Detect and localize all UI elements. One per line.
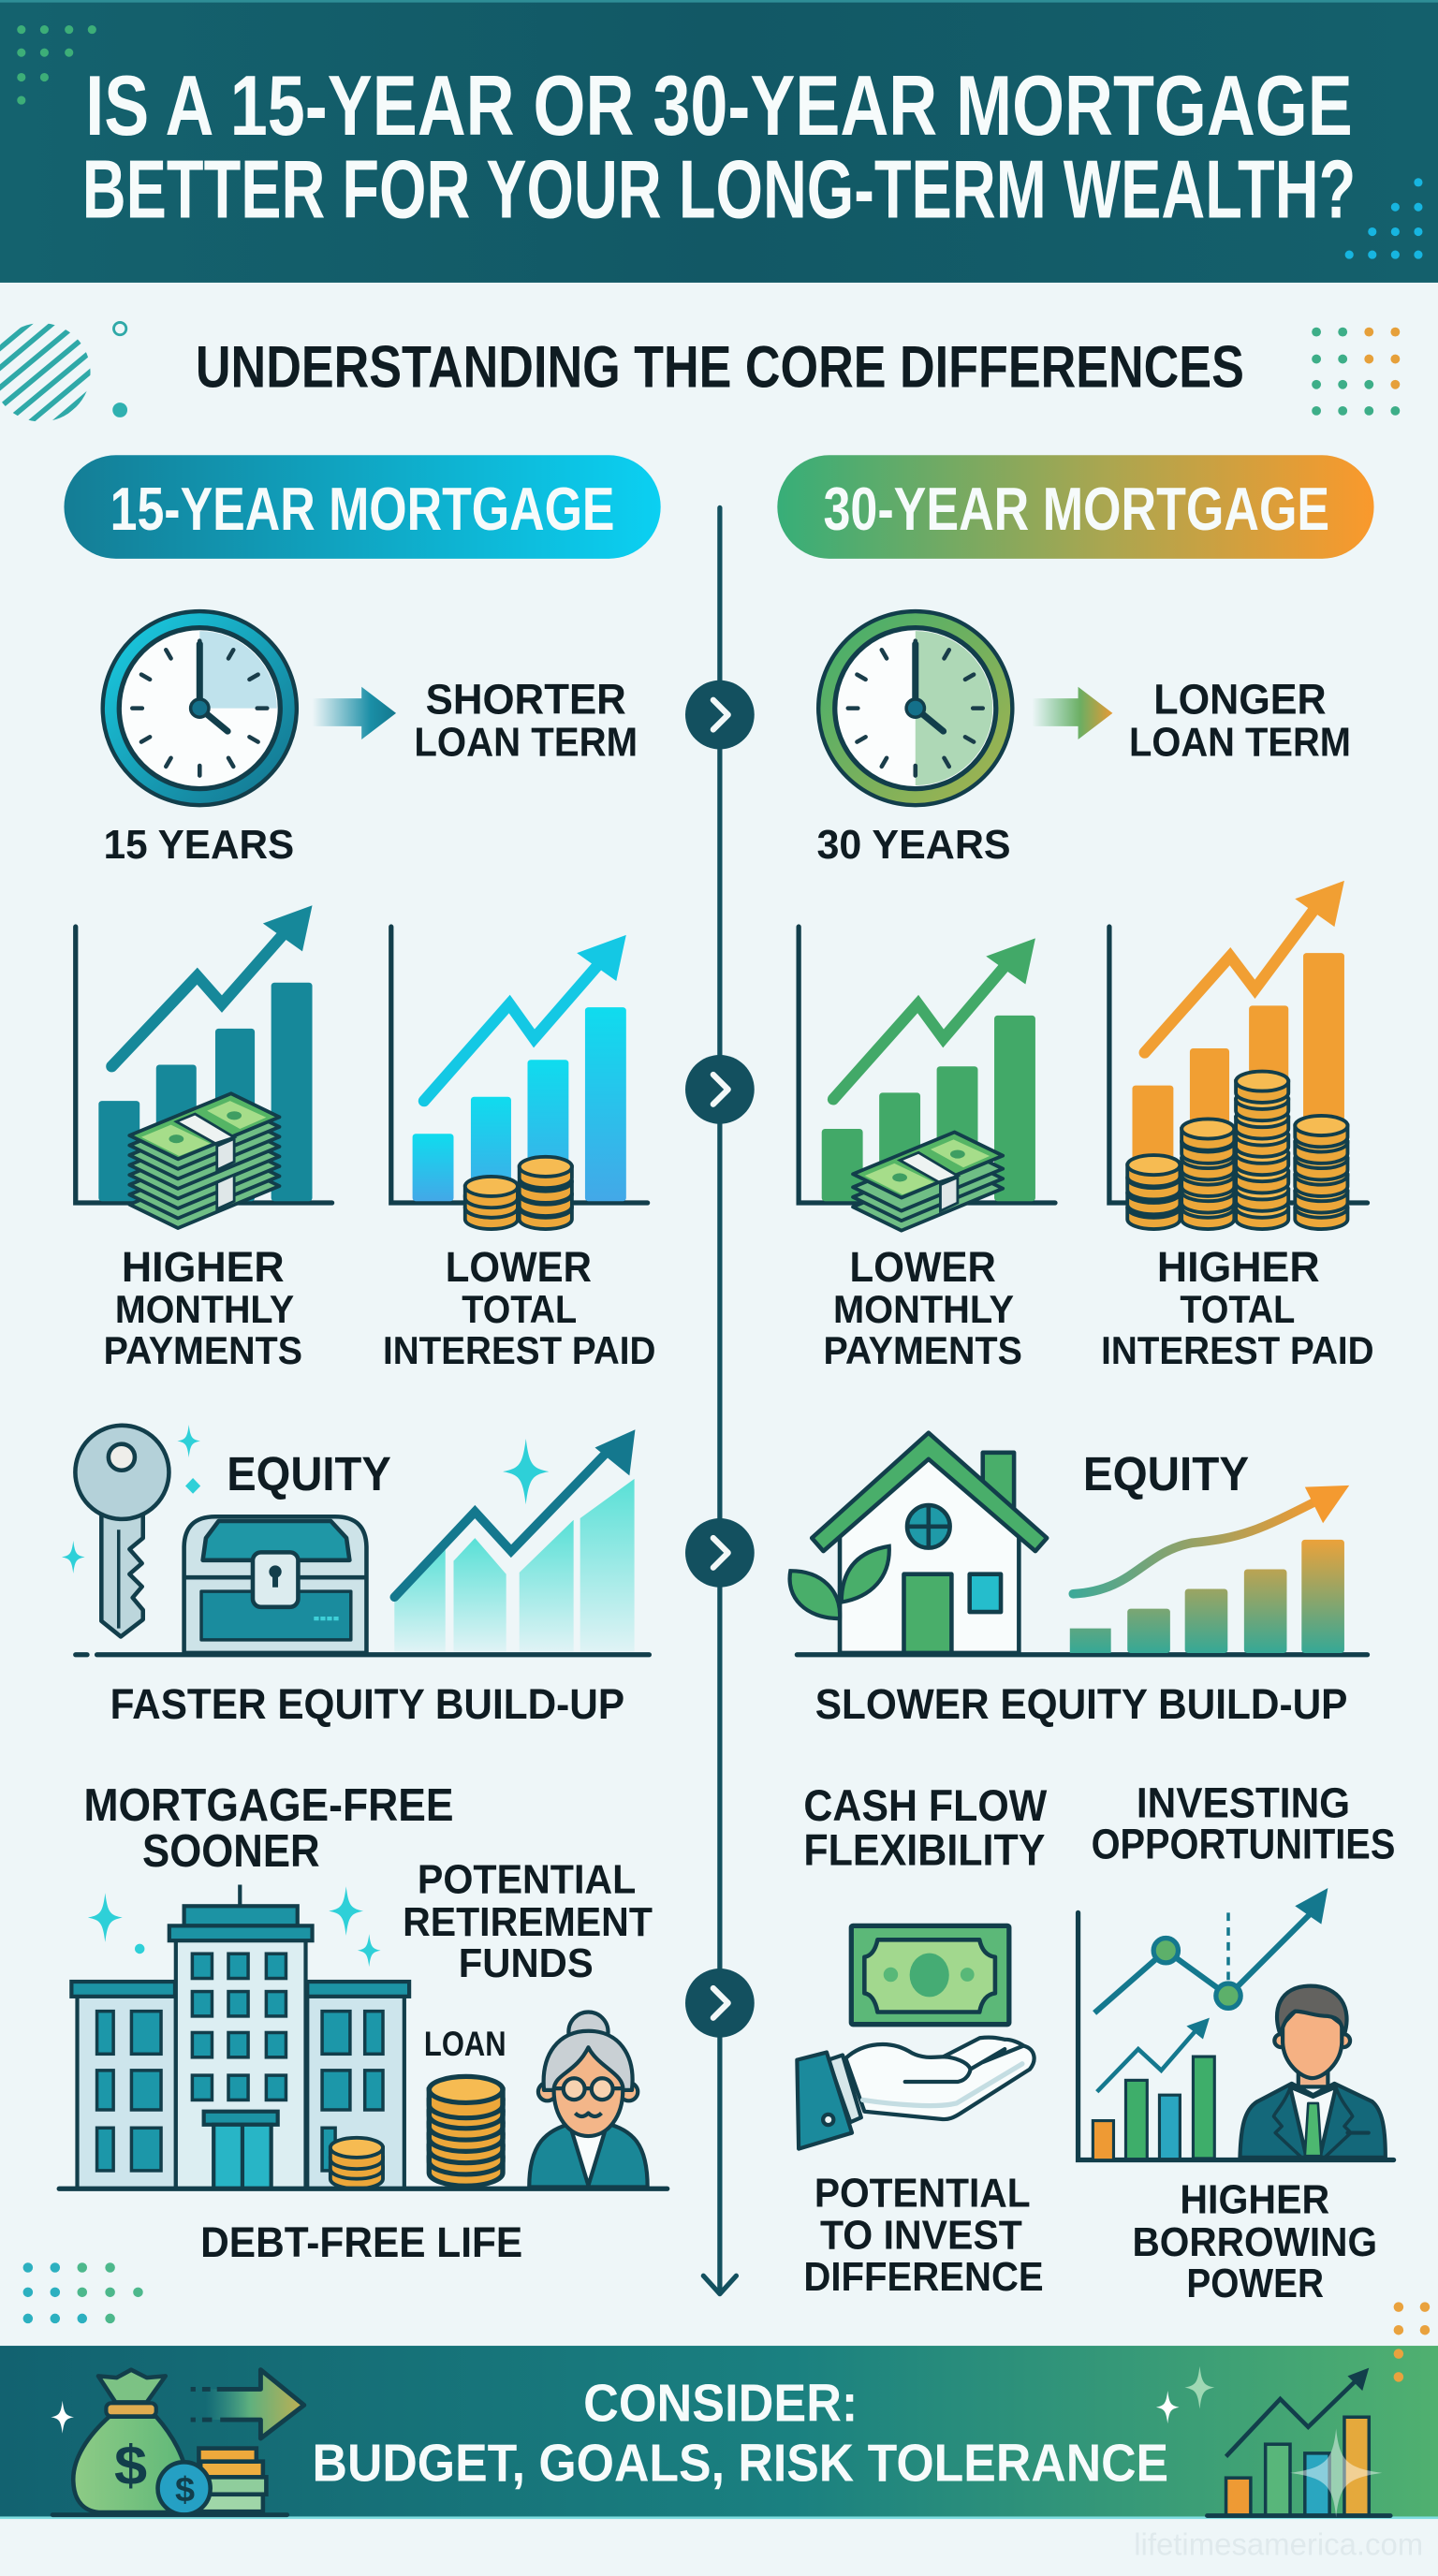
chart: higher monthly payments	[76, 905, 332, 1228]
label: lower monthly payments	[823, 1243, 1022, 1372]
label: mortgage-free sooner: SOONER	[142, 1826, 320, 1877]
label: potential to invest difference: DIFFERENCE	[803, 2254, 1044, 2300]
header banner	[0, 0, 1438, 283]
label: 15 years: 15 YEARS	[104, 822, 294, 868]
icon: open hand	[797, 2038, 1034, 2149]
label: higher total interest paid: INTEREST PAID	[1101, 1328, 1374, 1372]
pill: 15-year mortgage: 15-YEAR MORTGAGE	[110, 475, 615, 543]
label: slower equity build-up: SLOWER EQUITY BUILD-UP	[815, 1680, 1347, 1728]
icon: coin stacks	[1127, 1072, 1347, 1229]
chart: lower monthly payments	[799, 927, 1055, 1231]
label: equity: EQUITY	[227, 1447, 391, 1500]
label: equity: EQUITY	[1083, 1447, 1249, 1500]
icon: sparkle	[51, 2401, 74, 2434]
icon: plant	[790, 1546, 889, 1653]
label: 30 years: 30 YEARS	[816, 822, 1011, 868]
chart: equity bars	[1070, 1486, 1349, 1653]
label: investing opportunities: OPPORTUNITIES	[1092, 1820, 1395, 1867]
icon: cash stack	[853, 1132, 1003, 1231]
label: loan: LOAN	[424, 2025, 506, 2063]
chart: equity growth	[394, 1429, 635, 1651]
decorative dots: section right	[1312, 328, 1400, 416]
label: higher monthly payments: HIGHER	[122, 1243, 285, 1291]
arrow: 30-year term	[1032, 687, 1112, 739]
illustration: slower equity	[790, 1433, 1368, 1655]
chart: higher total interest paid	[1109, 881, 1368, 1229]
icon: money bag: $	[114, 2434, 147, 2496]
icon: building	[71, 1884, 409, 2188]
icon: small coins	[330, 2138, 383, 2188]
icon: key	[75, 1426, 169, 1636]
label: debt-free life: DEBT-FREE LIFE	[200, 2218, 522, 2266]
label: potential to invest difference: TO INVEST	[820, 2212, 1022, 2258]
label: higher borrowing power: HIGHER	[1180, 2177, 1329, 2223]
label: potential retirement funds: FUNDS	[459, 1940, 594, 1986]
icon: large coins	[429, 2076, 503, 2186]
label: higher monthly payments: MONTHLY	[115, 1287, 294, 1331]
label: potential retirement funds: RETIREMENT	[403, 1899, 653, 1945]
icon: arrow	[191, 2370, 304, 2438]
nav marker 1	[685, 681, 755, 749]
footer text: BUDGET, GOALS, RISK TOLERANCE	[313, 2434, 1168, 2493]
label: potential to invest difference	[803, 2171, 1044, 2300]
label: higher borrowing power: BORROWING	[1132, 2219, 1377, 2265]
nav marker 2	[685, 1055, 755, 1124]
label: higher borrowing power: POWER	[1186, 2261, 1324, 2306]
label: longer loan term: LONGER	[1153, 676, 1327, 724]
label: cash flow flexibility: CASH FLOW	[803, 1781, 1047, 1831]
label: higher monthly payments	[104, 1243, 302, 1372]
label: shorter loan term: LOAN TERM	[414, 720, 638, 766]
decorative dots: bottom right	[1394, 2302, 1430, 2382]
label: potential retirement funds	[403, 1856, 653, 1986]
decorative striped circle	[0, 321, 127, 421]
icon: treasure chest	[184, 1516, 366, 1653]
label: mortgage-free sooner: MORTGAGE-FREE	[84, 1780, 453, 1831]
label: cash flow flexibility	[803, 1781, 1047, 1875]
icon: coin stacks	[465, 1157, 572, 1229]
label: lower monthly payments: MONTHLY	[833, 1287, 1014, 1331]
chart: investing opportunities	[1078, 1888, 1394, 2160]
label: mortgage-free sooner	[84, 1780, 453, 1877]
label: higher total interest paid	[1101, 1243, 1374, 1372]
label: higher monthly payments: PAYMENTS	[104, 1328, 302, 1372]
title	[82, 58, 1356, 236]
label: lower total interest paid: TOTAL	[462, 1287, 577, 1331]
arrow: 15-year term	[313, 687, 396, 739]
label: faster equity build-up: FASTER EQUITY BUILD-UP	[110, 1680, 624, 1728]
pill: 30-year mortgage	[777, 455, 1374, 559]
label: shorter loan term: SHORTER	[426, 676, 626, 724]
footer banner	[0, 2302, 1438, 2519]
pill: 30-year mortgage: 30-YEAR MORTGAGE	[823, 475, 1329, 543]
footer text	[313, 2374, 1168, 2493]
label: higher borrowing power	[1132, 2177, 1377, 2306]
nav marker 3	[685, 1518, 755, 1588]
decorative dots: bottom left	[23, 2262, 143, 2323]
icon: growth chart	[1156, 2366, 1390, 2517]
label: potential to invest difference: POTENTIAL	[814, 2171, 1031, 2217]
icon: grandmother	[529, 2012, 648, 2187]
label: lower monthly payments: LOWER	[850, 1243, 996, 1291]
icon: money bag	[52, 2370, 287, 2515]
icon: sparkles	[62, 1425, 549, 1573]
icon: cash stack	[129, 1093, 279, 1228]
label: lower total interest paid: LOWER	[446, 1243, 592, 1291]
icon: banknote	[851, 1925, 1009, 2025]
label: lower total interest paid	[383, 1243, 655, 1372]
chart: lower total interest paid	[391, 927, 648, 1229]
decorative dots: header left	[17, 25, 96, 105]
center divider arrow	[703, 507, 736, 2294]
label: potential retirement funds: POTENTIAL	[418, 1856, 636, 1902]
icon: money bag: $	[175, 2470, 195, 2509]
label: investing opportunities	[1092, 1779, 1395, 1867]
decorative dots: header right	[1345, 178, 1422, 259]
icon: businessman	[1240, 1986, 1386, 2158]
label: lower monthly payments: PAYMENTS	[823, 1328, 1022, 1372]
footer text: CONSIDER:	[583, 2374, 858, 2433]
label: investing opportunities: INVESTING	[1137, 1779, 1350, 1827]
clock: 15 years	[103, 611, 297, 805]
pill: 15-year mortgage	[64, 455, 661, 559]
label: lower total interest paid: INTEREST PAID	[383, 1328, 655, 1372]
section heading: UNDERSTANDING THE CORE DIFFERENCES	[196, 334, 1244, 400]
icon: house	[812, 1433, 1047, 1653]
watermark: lifetimesamerica.com	[1134, 2528, 1423, 2563]
icon: sparkles	[1156, 2366, 1214, 2423]
label: longer loan term: LOAN TERM	[1129, 720, 1351, 766]
illustration: debt-free building	[59, 1884, 668, 2188]
label: cash flow flexibility: FLEXIBILITY	[803, 1825, 1045, 1875]
illustration: faster equity	[62, 1425, 649, 1655]
icon: sparkles	[88, 1886, 381, 1967]
clock: 30 years	[818, 611, 1012, 805]
label: longer loan term	[1129, 676, 1351, 766]
label: higher total interest paid: HIGHER	[1157, 1243, 1320, 1291]
label: shorter loan term	[414, 676, 638, 766]
nav marker 4	[685, 1969, 755, 2038]
label: higher total interest paid: TOTAL	[1180, 1287, 1295, 1331]
